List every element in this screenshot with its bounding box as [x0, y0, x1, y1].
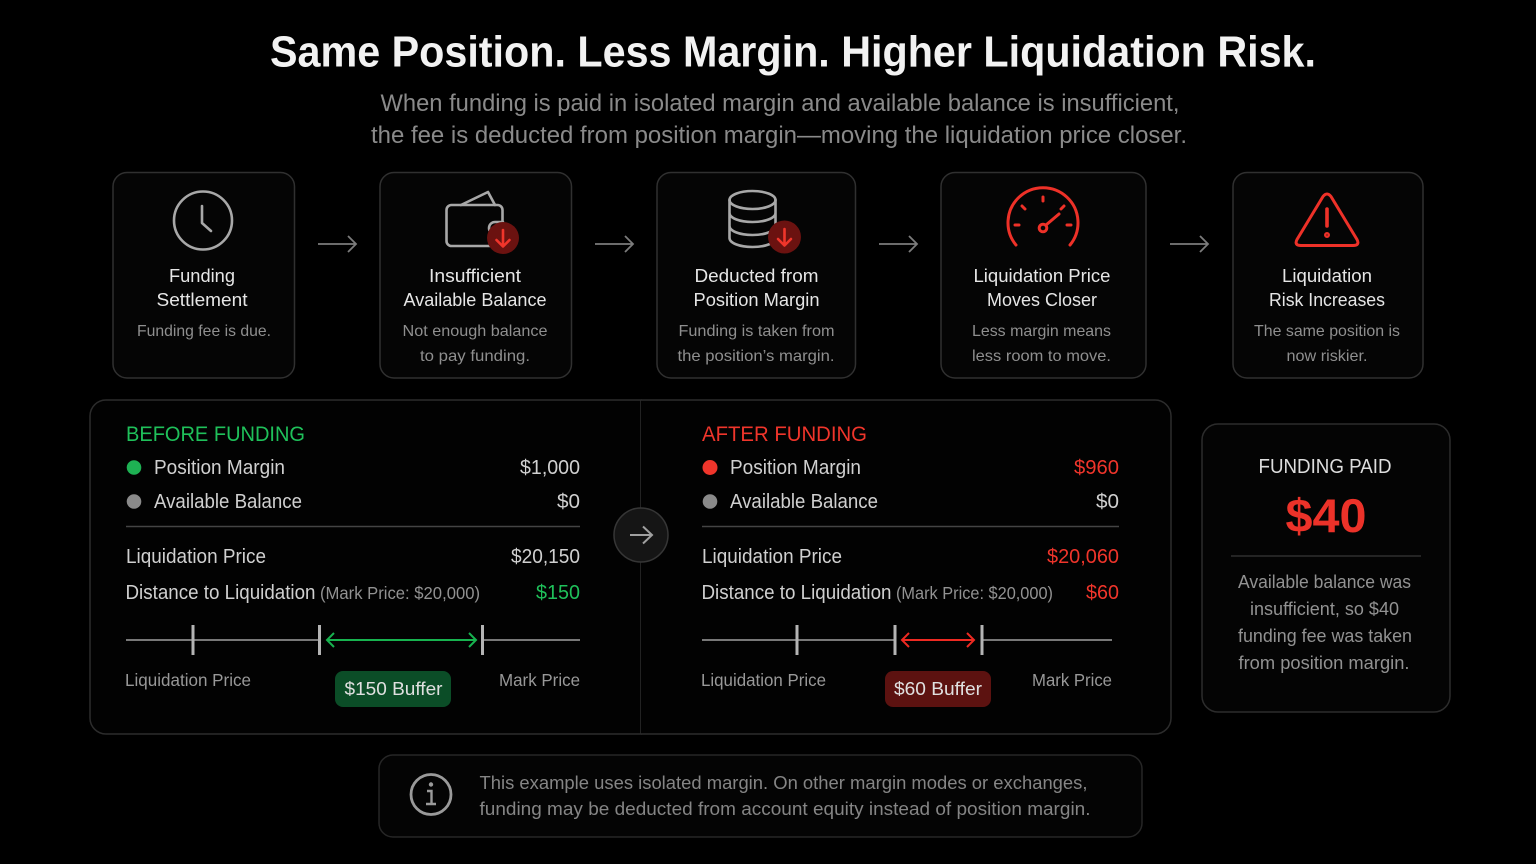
chart: after price scale: Mark Price	[1032, 670, 1112, 690]
step heading: risk increases: Liquidation	[1282, 266, 1372, 286]
row: liquidation price: $20,150	[511, 546, 580, 568]
chart: after price scale	[701, 625, 1112, 707]
text: note: funding may be deducted from account equity instead of position margin.	[480, 798, 1090, 819]
heading: before funding: BEFORE FUNDING	[126, 423, 305, 446]
panel: after funding	[641, 400, 1171, 734]
row: available balance	[127, 491, 580, 513]
row: liquidation price: Liquidation Price	[126, 546, 266, 568]
step text: deducted from margin: Funding is taken from	[678, 323, 834, 340]
panel: insufficient balance step	[380, 172, 572, 378]
step heading: liquidation price: Liquidation Price	[974, 266, 1110, 286]
text: funding paid explanation	[1238, 571, 1412, 673]
row: distance to liquidation	[126, 582, 580, 604]
panel: before funding	[90, 400, 641, 734]
chart: before price scale: Mark Price	[499, 670, 580, 690]
row: distance to liquidation after	[702, 582, 1119, 604]
icon: wallet with down arrow	[446, 192, 519, 254]
step heading: funding settlement	[156, 266, 248, 310]
step text: insufficient balance	[402, 323, 548, 365]
row: position margin	[127, 457, 580, 479]
icon: before to after arrow	[614, 508, 668, 562]
step heading: risk increases: Risk Increases	[1269, 290, 1385, 310]
step text: deducted from margin: the position’s margin.	[678, 348, 834, 365]
row: distance to liquidation: Distance to Liquidation	[126, 582, 316, 604]
panel: liquidation price step	[941, 172, 1146, 378]
step heading: risk increases	[1269, 266, 1385, 310]
arrow: step 2 to 3	[595, 236, 633, 252]
chart: after price scale: Liquidation Price	[701, 670, 826, 690]
row: available balance: Available Balance	[154, 491, 302, 513]
row: liquidation price after: Liquidation Price	[702, 546, 842, 568]
row: distance to liquidation: $150	[536, 582, 580, 604]
step text: risk increases: The same position is	[1254, 323, 1400, 340]
text: funding paid explanation: from position margin.	[1238, 652, 1410, 673]
heading: after funding: AFTER FUNDING	[702, 423, 867, 446]
row: position margin after: Position Margin	[730, 457, 861, 479]
step text: liquidation price	[972, 323, 1111, 365]
step heading: deducted from margin: Position Margin	[694, 290, 820, 310]
icon: red gauge	[1008, 188, 1078, 245]
chart: before price scale: $150 Buffer	[344, 678, 442, 699]
step heading: liquidation price	[974, 266, 1110, 310]
text: funding paid explanation: Available balance was	[1238, 571, 1411, 592]
panel: funding paid	[1202, 424, 1450, 712]
row: distance to liquidation: (Mark Price: $20,000)	[320, 583, 480, 603]
panel: deducted from margin step	[657, 172, 856, 378]
text: funding paid explanation: funding fee was taken	[1238, 625, 1412, 646]
text: note	[480, 772, 1090, 819]
arrow: step 3 to 4	[879, 236, 917, 252]
step text: insufficient balance: to pay funding.	[420, 348, 530, 365]
row: position margin after: $960	[1074, 457, 1119, 479]
row: available balance after: Available Balance	[730, 491, 878, 513]
title: Same Position. Less Margin. Higher Liquidation Risk.	[270, 28, 1316, 76]
arrow: step 1 to 2	[318, 236, 356, 252]
row: liquidation price	[126, 546, 580, 568]
step heading: funding settlement: Funding	[169, 266, 235, 286]
row: position margin: $1,000	[520, 457, 580, 479]
panel: risk increases step	[1233, 172, 1423, 378]
row: position margin: Position Margin	[154, 457, 285, 479]
step heading: insufficient balance: Available Balance	[404, 290, 546, 310]
row: position margin after	[702, 457, 1119, 479]
subtitle: the fee is deducted from position margin—moving the liquidation price closer.	[371, 122, 1187, 149]
step heading: deducted from margin: Deducted from	[694, 266, 818, 286]
text: note: This example uses isolated margin. On other margin modes or exchanges,	[480, 772, 1088, 793]
step text: risk increases: now riskier.	[1286, 348, 1368, 365]
panel: funding settlement step	[113, 172, 294, 378]
icon: database stack with down arrow	[730, 191, 801, 254]
row: distance to liquidation after: Distance to Liquidation	[702, 582, 892, 604]
step text: risk increases	[1254, 323, 1400, 365]
icon: clock	[174, 192, 232, 250]
value: $40: $40	[1286, 489, 1366, 542]
row: liquidation price after: $20,060	[1047, 546, 1119, 568]
row: available balance after: $0	[1096, 491, 1119, 513]
icon: info	[411, 774, 451, 814]
step text: liquidation price: Less margin means	[972, 323, 1111, 340]
icon: warning triangle	[1296, 194, 1358, 246]
row: liquidation price after	[702, 546, 1119, 568]
subtitle: When funding is paid in isolated margin and available balance is insufficient,	[380, 90, 1180, 117]
chart: before price scale: Liquidation Price	[125, 670, 251, 690]
step heading: deducted from margin	[694, 266, 820, 310]
step heading: liquidation price: Moves Closer	[987, 290, 1097, 310]
row: distance to liquidation after: (Mark Price: $20,000)	[896, 583, 1053, 603]
row: available balance: $0	[557, 491, 580, 513]
chart: before price scale	[125, 625, 580, 707]
step text: funding settlement: Funding fee is due.	[137, 323, 271, 340]
chart: after price scale: $60 Buffer	[894, 678, 982, 699]
row: available balance after	[703, 491, 1119, 513]
step text: liquidation price: less room to move.	[972, 348, 1111, 365]
text: funding paid explanation: insufficient, so $40	[1250, 598, 1399, 619]
callout: isolated margin note	[379, 755, 1142, 837]
row: distance to liquidation after: $60	[1086, 582, 1119, 604]
subtitle	[371, 90, 1187, 149]
step heading: insufficient balance: Insufficient	[429, 266, 521, 286]
step heading: funding settlement: Settlement	[156, 290, 248, 310]
arrow: step 4 to 5	[1170, 236, 1208, 252]
step heading: insufficient balance	[404, 266, 546, 310]
step text: deducted from margin	[678, 323, 834, 365]
label: funding paid: FUNDING PAID	[1258, 456, 1392, 478]
step text: insufficient balance: Not enough balance	[402, 323, 548, 340]
